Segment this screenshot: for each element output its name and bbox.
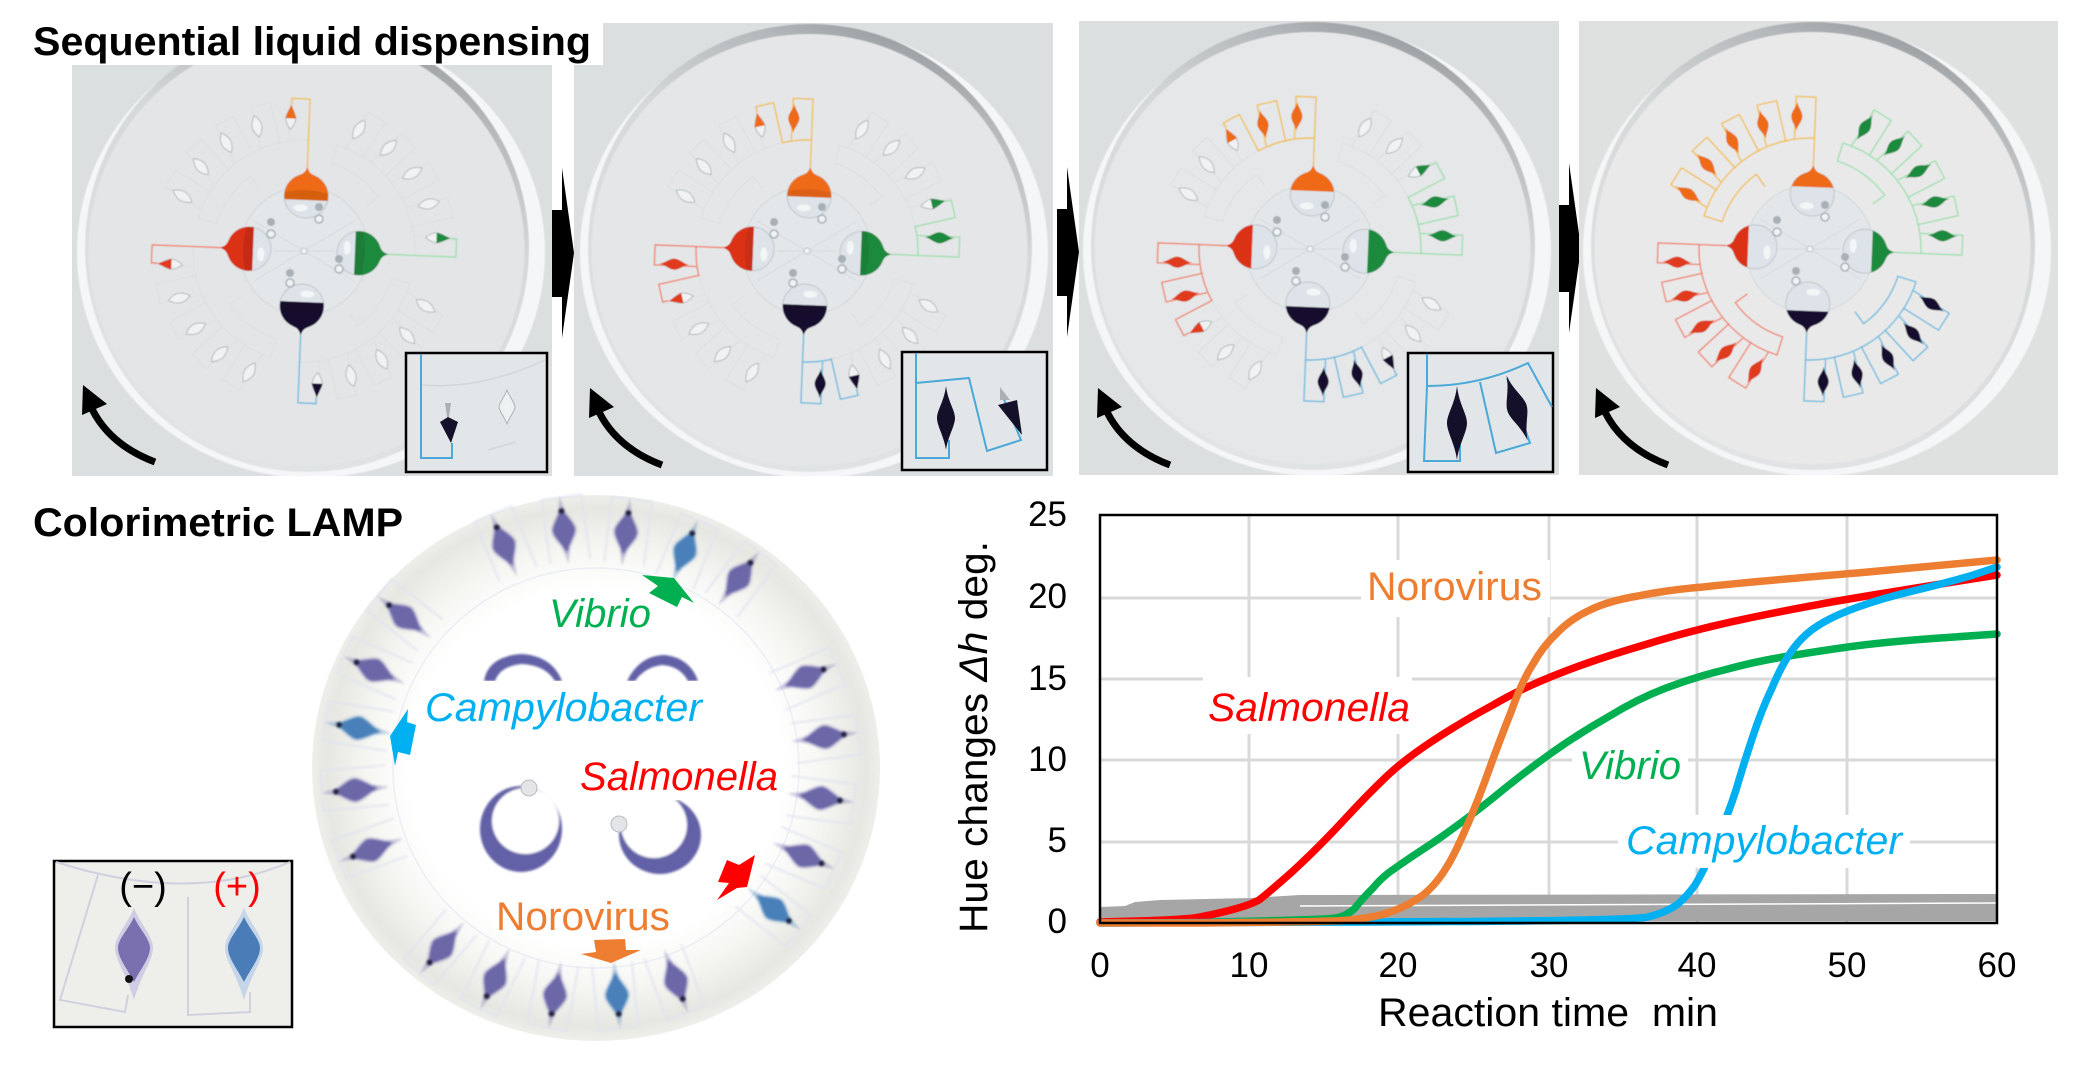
label: Norovirus with arrow: [496, 895, 670, 963]
arrow: step 2 to step 3: [1057, 167, 1079, 337]
x axis tick labels: 40: [1678, 946, 1716, 985]
panel: dispensing step 4 disc photo: [1579, 21, 2058, 476]
heading: colorimetric LAMP: Colorimetric LAMP: [33, 501, 403, 545]
y axis title: Hue changes Δh deg.: [952, 541, 996, 933]
inset: step 2 magnified wells: [902, 352, 1047, 470]
y axis tick labels: 5: [1048, 821, 1067, 860]
wells: blue positive reactions: [321, 513, 812, 1031]
icon: rotation arrow step 2: [589, 388, 662, 465]
label: Salmonella with arrow: [580, 755, 778, 900]
curve label: Norovirus: Norovirus: [1367, 565, 1542, 609]
y axis tick labels: 25: [1028, 495, 1067, 534]
curve: Salmonella: [1100, 575, 1997, 922]
label: Vibrio with arrow: [549, 575, 694, 636]
y axis tick labels: 10: [1028, 740, 1067, 779]
inset: negative and positive well comparison: [54, 861, 292, 1027]
icon: rotation arrow step 4: [1595, 388, 1668, 465]
x axis title: Reaction time min: [1378, 991, 1718, 1035]
wells: purple negative reactions: [319, 493, 862, 1032]
panel: dispensing step 1 disc photo: [72, 24, 552, 478]
panel: dispensing step 2 disc photo: [574, 23, 1053, 478]
x axis tick labels: 50: [1828, 946, 1866, 985]
x axis tick labels: 10: [1230, 946, 1268, 985]
x axis tick labels: 60: [1978, 946, 2016, 985]
label: Campylobacter with arrow: Campylobacter: [425, 686, 704, 730]
label: Norovirus with arrow: Norovirus: [496, 895, 670, 939]
x axis tick labels: 20: [1379, 946, 1417, 985]
curve label: Campylobacter: Campylobacter: [1626, 819, 1904, 863]
curve: Norovirus: [1100, 560, 1997, 923]
x axis tick labels: [1090, 946, 2016, 985]
panel: LAMP result disc: [312, 493, 880, 1041]
label masks: white gaps behind curve labels: [1203, 560, 1910, 868]
label: Vibrio with arrow: Vibrio: [549, 592, 651, 636]
negative controls: grey band: [1100, 894, 1997, 921]
inset: step 1 magnified well: [406, 353, 547, 472]
axes frame: [1100, 515, 1997, 923]
curve label: Salmonella: Salmonella: [1208, 686, 1410, 730]
label background: white mask behind disc labels: [420, 681, 782, 800]
y axis tick labels: 0: [1048, 902, 1067, 941]
curve: Campylobacter: [1100, 567, 1997, 923]
arrow: step 3 to step 4: [1559, 163, 1581, 333]
curve label: Vibrio: Vibrio: [1579, 744, 1681, 788]
y axis tick labels: 20: [1028, 577, 1067, 616]
y axis tick labels: [1028, 495, 1067, 941]
chart: hue change vs reaction time: [952, 495, 2016, 1035]
inset: step 3 magnified wells: [1408, 353, 1553, 472]
heading: sequential liquid dispensing: [0, 0, 603, 65]
panel: dispensing step 3 disc photo: [1079, 21, 1559, 476]
x axis tick labels: 0: [1090, 946, 1110, 985]
icon: rotation arrow step 1: [82, 385, 155, 462]
label: positive: (+): [213, 866, 261, 908]
label: Campylobacter with arrow: [390, 686, 704, 766]
x axis tick labels: 30: [1530, 946, 1568, 985]
label: negative: (−): [119, 866, 167, 908]
curve: Vibrio: [1100, 634, 1997, 923]
icon: rotation arrow step 3: [1097, 388, 1170, 465]
arrow: step 1 to step 2: [552, 168, 574, 338]
y axis tick labels: 15: [1028, 659, 1067, 698]
chamber remnants: [521, 780, 627, 832]
label: Salmonella with arrow: Salmonella: [580, 755, 778, 799]
reservoirs: stained chambers: [480, 654, 701, 874]
heading: sequential liquid dispensing: Sequential liquid dispensing: [33, 20, 591, 64]
